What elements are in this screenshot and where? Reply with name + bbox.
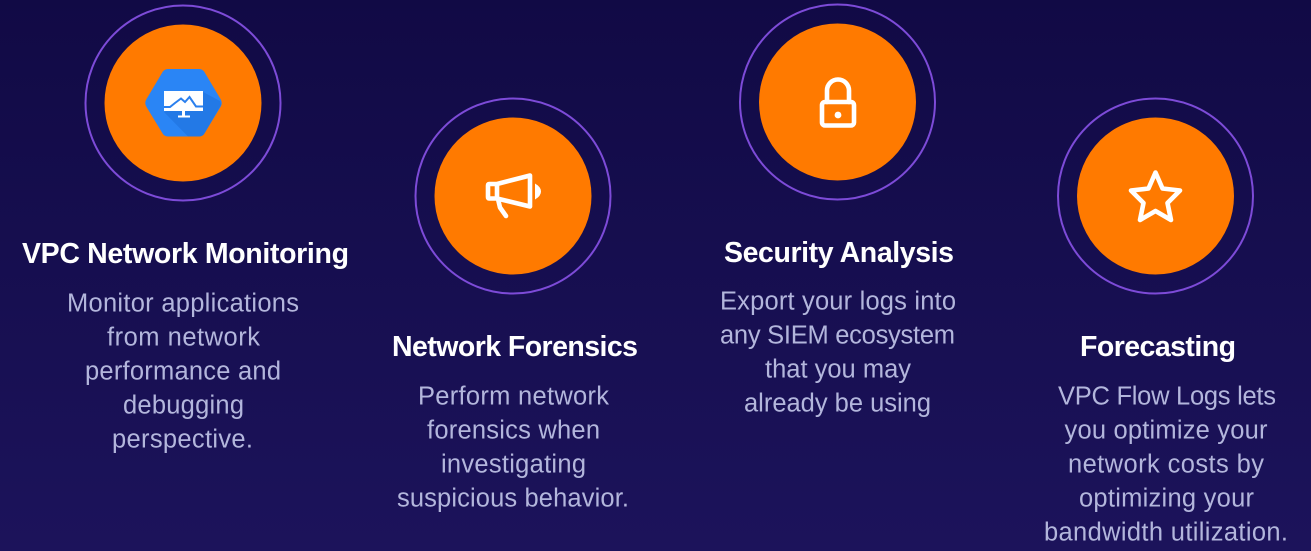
panel: Forecasting bbox=[1044, 98, 1288, 547]
text block: you optimize your bbox=[1064, 417, 1268, 445]
heading: VPC Network Monitoring bbox=[22, 238, 349, 270]
text block: perspective. bbox=[112, 426, 253, 454]
icon: orange disc with VPC monitoring hexagon bbox=[86, 6, 280, 200]
icon: orange disc with padlock bbox=[740, 4, 935, 200]
text block: network costs by bbox=[1068, 451, 1264, 479]
text block: forensics when bbox=[427, 417, 600, 445]
panel: Security Analysis bbox=[720, 4, 956, 418]
text block: any SIEM ecosystem bbox=[720, 322, 955, 350]
text block: optimizing your bbox=[1079, 485, 1254, 513]
text block: from network bbox=[107, 324, 260, 352]
text block: Export your logs into bbox=[720, 288, 956, 316]
icon: orange disc with megaphone bbox=[416, 98, 610, 294]
text block: performance and bbox=[85, 358, 281, 386]
text block: Monitor applications bbox=[67, 290, 299, 318]
heading: Network Forensics bbox=[392, 331, 638, 363]
text block bbox=[397, 383, 629, 513]
text block: that you may bbox=[765, 356, 911, 384]
text block bbox=[67, 290, 299, 454]
text block bbox=[1044, 383, 1288, 547]
text block: suspicious behavior. bbox=[397, 485, 629, 513]
text block bbox=[720, 288, 956, 418]
panel: Network Forensics bbox=[392, 98, 638, 513]
text block: already be using bbox=[744, 390, 931, 418]
text block: VPC Flow Logs lets bbox=[1058, 383, 1276, 411]
heading: Security Analysis bbox=[724, 237, 954, 269]
text block: debugging bbox=[123, 392, 244, 420]
panel: VPC Network Monitoring bbox=[22, 6, 349, 454]
heading: Forecasting bbox=[1080, 331, 1236, 363]
text block: Perform network bbox=[418, 383, 609, 411]
icon: orange disc with star bbox=[1058, 98, 1253, 294]
text block: investigating bbox=[441, 451, 586, 479]
text block: bandwidth utilization. bbox=[1044, 519, 1288, 547]
